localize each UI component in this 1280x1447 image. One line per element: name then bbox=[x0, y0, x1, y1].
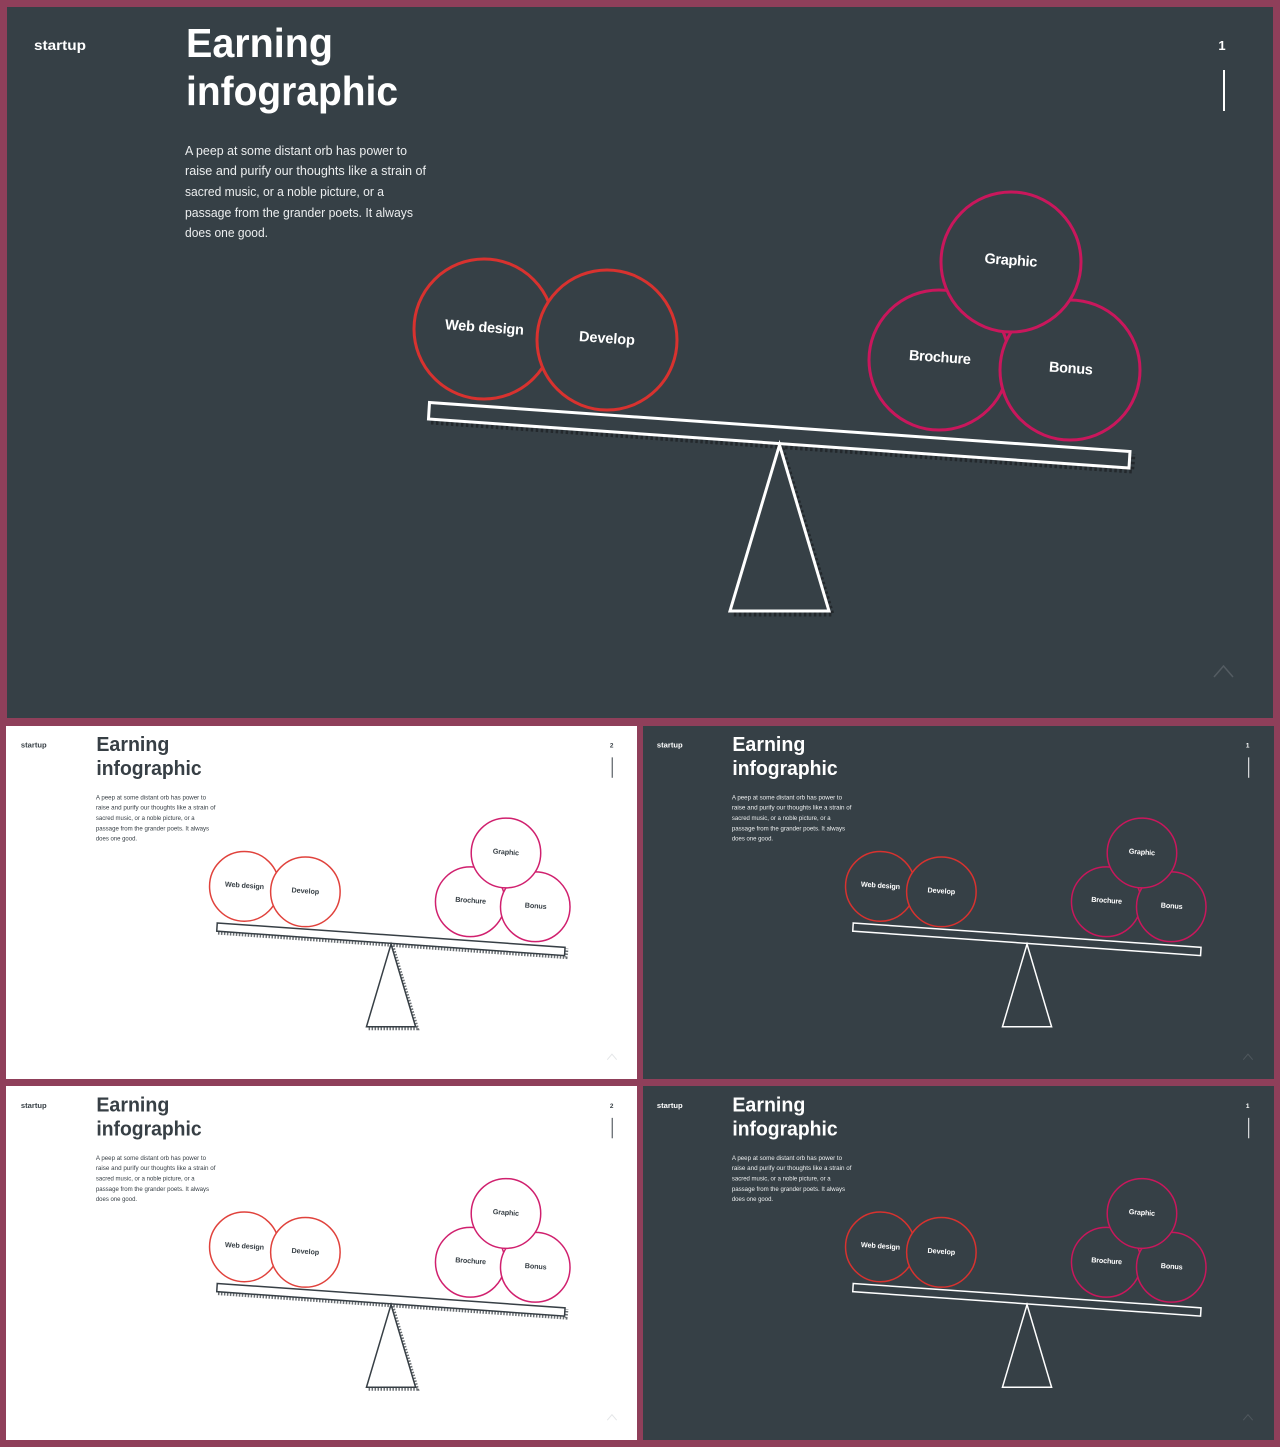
circle: Bonus bbox=[1000, 300, 1140, 440]
page marker line bbox=[611, 1118, 614, 1138]
page number: 1 bbox=[1218, 38, 1226, 53]
circle: Develop bbox=[271, 857, 340, 927]
body text: passage from the grander poets. It always bbox=[185, 205, 413, 220]
body text bbox=[732, 1155, 852, 1203]
page number: 1 bbox=[1246, 742, 1250, 749]
circle: Develop bbox=[271, 1217, 340, 1287]
title: Earning bbox=[96, 1094, 169, 1116]
body text bbox=[732, 795, 852, 843]
body text: passage from the grander poets. It always bbox=[96, 826, 209, 833]
circle: Develop: Develop bbox=[291, 885, 320, 896]
circle: Graphic: Graphic bbox=[1129, 1207, 1155, 1218]
body text: passage from the grander poets. It always bbox=[732, 826, 845, 833]
body text: sacred music, or a noble picture, or a bbox=[96, 1176, 195, 1183]
page marker line bbox=[611, 757, 614, 778]
body text bbox=[96, 795, 216, 843]
page marker line bbox=[1247, 1118, 1250, 1138]
body text: A peep at some distant orb has power to bbox=[732, 1155, 842, 1162]
seesaw beam bbox=[428, 402, 1130, 468]
panel: small white slide bottom bbox=[6, 1086, 637, 1440]
icon: up chevron bbox=[1214, 666, 1233, 677]
page number: 2 bbox=[610, 1103, 614, 1110]
title: infographic bbox=[96, 758, 202, 780]
circle: Develop: Develop bbox=[927, 885, 956, 896]
brand name: startup bbox=[34, 37, 86, 53]
body text: does one good. bbox=[732, 836, 773, 843]
circle: Graphic: Graphic bbox=[1129, 847, 1155, 857]
circle: Brochure bbox=[1071, 867, 1141, 937]
circle: Web design: Web design bbox=[225, 879, 264, 891]
body text: A peep at some distant orb has power to bbox=[96, 795, 206, 802]
circle: Brochure bbox=[1071, 1227, 1141, 1297]
brand name: startup bbox=[21, 742, 47, 749]
circle: Bonus bbox=[1136, 1232, 1206, 1302]
icon: up chevron bbox=[607, 1415, 617, 1420]
body text bbox=[185, 143, 426, 240]
body text: raise and purify our thoughts like a strain of bbox=[96, 1165, 216, 1172]
circle: Web design bbox=[210, 851, 279, 921]
panel: small white slide top bbox=[6, 726, 637, 1079]
title: Earning bbox=[732, 734, 805, 756]
circle: Develop bbox=[907, 1217, 976, 1287]
title: infographic bbox=[732, 758, 838, 780]
circle: Graphic: Graphic bbox=[493, 847, 519, 857]
body text: sacred music, or a noble picture, or a bbox=[732, 1176, 831, 1183]
seesaw fulcrum bbox=[1002, 1305, 1052, 1387]
body text: raise and purify our thoughts like a strain of bbox=[185, 163, 426, 178]
circle: Graphic: Graphic bbox=[984, 251, 1038, 271]
circle: Bonus: Bonus bbox=[1161, 1261, 1183, 1272]
circle: Develop: Develop bbox=[927, 1246, 956, 1257]
circle: Graphic bbox=[1107, 818, 1177, 888]
seesaw fulcrum bbox=[730, 445, 829, 611]
circle: Bonus bbox=[1136, 872, 1206, 942]
body text: A peep at some distant orb has power to bbox=[96, 1155, 206, 1162]
title: infographic bbox=[732, 1118, 838, 1140]
circle: Bonus bbox=[500, 1232, 570, 1302]
circle: Graphic: Graphic bbox=[493, 1207, 519, 1218]
body text: raise and purify our thoughts like a strain of bbox=[732, 805, 852, 812]
title: infographic bbox=[96, 1118, 202, 1140]
icon: up chevron bbox=[607, 1054, 617, 1060]
circle: Web design: Web design bbox=[444, 317, 524, 339]
title: Earning bbox=[732, 1094, 805, 1116]
body text: does one good. bbox=[185, 225, 268, 240]
circle: Web design bbox=[210, 1212, 279, 1282]
circle: Graphic bbox=[471, 1179, 541, 1248]
title bbox=[186, 20, 398, 114]
seesaw fulcrum bbox=[366, 1305, 416, 1387]
body text: A peep at some distant orb has power to bbox=[185, 143, 407, 158]
circle: Brochure bbox=[435, 867, 505, 937]
circle: Bonus: Bonus bbox=[1161, 900, 1183, 911]
page number: 1 bbox=[1246, 1103, 1250, 1110]
title: Earning bbox=[96, 734, 169, 756]
body text: passage from the grander poets. It always bbox=[96, 1186, 209, 1193]
brand name: startup bbox=[657, 1103, 683, 1110]
body text: does one good. bbox=[96, 1196, 137, 1203]
brand name: startup bbox=[657, 742, 683, 749]
page number: 2 bbox=[610, 742, 614, 749]
seesaw fulcrum bbox=[1002, 944, 1052, 1027]
title bbox=[732, 734, 838, 780]
panel: small dark slide top bbox=[643, 726, 1274, 1079]
circle: Web design bbox=[846, 851, 915, 921]
body text bbox=[96, 1155, 216, 1203]
body text: does one good. bbox=[732, 1196, 773, 1203]
seesaw fulcrum bbox=[366, 944, 416, 1027]
circle: Brochure bbox=[435, 1227, 505, 1297]
slide content bbox=[657, 1094, 1253, 1420]
circle: Graphic bbox=[471, 818, 541, 888]
seesaw beam bbox=[853, 923, 1201, 956]
circle: Web design: Web design bbox=[861, 879, 900, 891]
seesaw shadow hatch bbox=[218, 933, 567, 1029]
circle: Brochure: Brochure bbox=[455, 1255, 486, 1266]
circle: Brochure: Brochure bbox=[1091, 1255, 1122, 1266]
circle: Develop: Develop bbox=[578, 329, 636, 349]
circle: Bonus: Bonus bbox=[525, 900, 547, 911]
circle: Web design bbox=[414, 259, 554, 399]
seesaw shadow hatch bbox=[431, 422, 1134, 614]
body text: A peep at some distant orb has power to bbox=[732, 795, 842, 802]
circle: Web design: Web design bbox=[861, 1240, 900, 1252]
circle: Brochure: Brochure bbox=[1091, 895, 1122, 906]
title bbox=[732, 1094, 838, 1140]
circle: Web design: Web design bbox=[225, 1240, 264, 1252]
body text: sacred music, or a noble picture, or a bbox=[185, 184, 385, 199]
seesaw beam bbox=[853, 1283, 1201, 1316]
title: infographic bbox=[186, 68, 398, 114]
page marker line bbox=[1223, 70, 1225, 111]
body text: sacred music, or a noble picture, or a bbox=[96, 815, 195, 822]
panel: small dark slide bottom bbox=[643, 1086, 1274, 1440]
circle: Graphic bbox=[941, 192, 1081, 332]
panel: large dark slide bbox=[7, 7, 1273, 718]
slide content bbox=[657, 734, 1253, 1060]
circle: Bonus: Bonus bbox=[1048, 359, 1093, 379]
title: Earning bbox=[186, 20, 333, 66]
title bbox=[96, 734, 202, 780]
seesaw beam bbox=[217, 923, 565, 956]
icon: up chevron bbox=[1243, 1054, 1253, 1060]
circle: Web design bbox=[846, 1212, 915, 1282]
circle: Brochure: Brochure bbox=[455, 895, 486, 906]
body text: sacred music, or a noble picture, or a bbox=[732, 815, 831, 822]
body text: does one good. bbox=[96, 836, 137, 843]
seesaw beam bbox=[217, 1283, 565, 1316]
circle: Brochure bbox=[869, 290, 1009, 430]
circle: Develop bbox=[907, 857, 976, 927]
body text: passage from the grander poets. It always bbox=[732, 1186, 845, 1193]
seesaw shadow hatch bbox=[218, 1294, 567, 1389]
circle: Bonus: Bonus bbox=[525, 1261, 547, 1272]
icon: up chevron bbox=[1243, 1415, 1253, 1420]
body text: raise and purify our thoughts like a strain of bbox=[96, 805, 216, 812]
circle: Develop bbox=[537, 270, 677, 410]
slide content bbox=[21, 734, 617, 1060]
circle: Bonus bbox=[500, 872, 570, 942]
brand name: startup bbox=[21, 1103, 47, 1110]
circle: Brochure: Brochure bbox=[908, 348, 971, 368]
body text: raise and purify our thoughts like a strain of bbox=[732, 1165, 852, 1172]
title bbox=[96, 1094, 202, 1140]
slide content bbox=[21, 1094, 617, 1420]
circle: Graphic bbox=[1107, 1179, 1177, 1248]
page marker line bbox=[1247, 757, 1250, 778]
circle: Develop: Develop bbox=[291, 1246, 320, 1257]
